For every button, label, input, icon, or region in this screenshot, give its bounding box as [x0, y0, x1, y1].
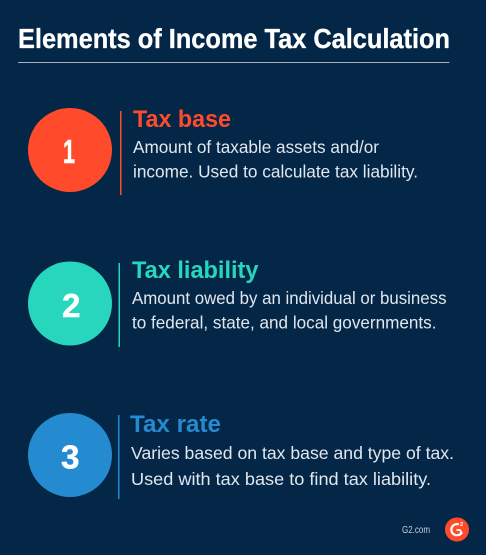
heading: tax rate: Tax rate — [130, 411, 221, 438]
panel: tax liability — [28, 257, 447, 347]
heading: tax liability: Tax liability — [132, 257, 259, 284]
description: tax liability — [132, 288, 447, 332]
description: tax base: Amount of taxable assets and/or — [133, 137, 379, 157]
description: tax base: income. Used to calculate tax liability. — [133, 162, 418, 182]
description: tax liability: Amount owed by an individual or business — [132, 288, 447, 308]
description: tax base — [133, 137, 418, 182]
icon: G2 logo: 2 — [460, 522, 463, 528]
circle badge 1: 1 — [63, 133, 75, 170]
panel: tax rate — [28, 411, 454, 499]
description: tax rate — [131, 443, 454, 489]
description: tax liability: to federal, state, and local governments. — [132, 312, 436, 332]
description: tax rate: Used with tax base to find tax liability. — [131, 469, 431, 489]
icon: G2 logo — [445, 518, 469, 542]
circle badge 2: 2 — [62, 287, 80, 324]
circle badge 2 — [28, 262, 112, 346]
circle badge 3 — [28, 413, 112, 497]
heading: tax base: Tax base — [133, 106, 231, 133]
description: tax rate: Varies based on tax base and type of tax. — [131, 443, 454, 463]
circle badge 3: 3 — [61, 438, 80, 476]
circle badge 1 — [28, 108, 112, 192]
title: Elements of Income Tax Calculation — [18, 23, 450, 54]
source label: G2.com — [402, 524, 430, 536]
panel: tax base — [28, 106, 418, 195]
